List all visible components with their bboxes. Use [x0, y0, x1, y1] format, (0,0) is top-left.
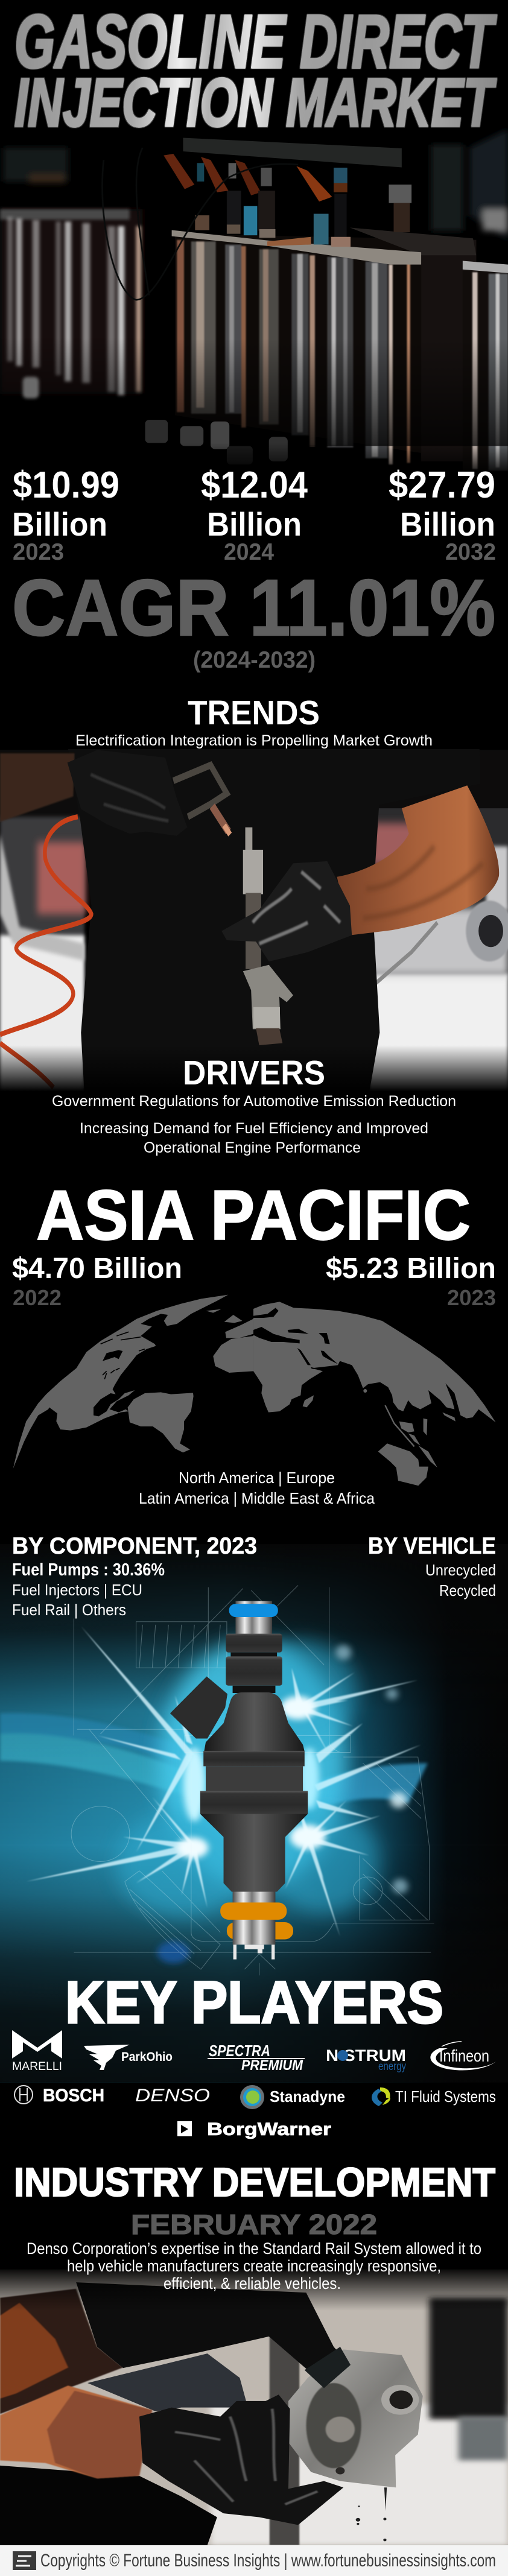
blue o-ring — [229, 1604, 278, 1617]
by component list: Fuel Pumps : 30.36% — [12, 1560, 165, 1580]
2023 value: 2023 — [13, 539, 64, 565]
logo: BorgWarner — [177, 2119, 331, 2139]
by vehicle list: Recycled — [439, 1581, 496, 1600]
vertical falloff — [0, 1544, 508, 2083]
fuel injector — [243, 828, 293, 1045]
logo: ParkOhio: ParkOhio — [121, 2050, 173, 2064]
centre tank — [172, 227, 476, 464]
madagascar — [303, 1395, 314, 1407]
lower tank shade — [0, 338, 508, 446]
side connector — [170, 1676, 227, 1738]
by vehicle heading: BY VEHICLE — [368, 1533, 496, 1559]
by vehicle list: Unrecycled — [425, 1561, 496, 1579]
world map dome — [13, 1295, 496, 1486]
2023 value: $10.99 — [13, 464, 119, 506]
region heading: ASIA PACIFIC — [36, 1176, 471, 1255]
other regions list — [139, 1469, 375, 1507]
arctic channels — [101, 1332, 145, 1379]
logo: Stanadyne: Stanadyne — [270, 2087, 345, 2106]
top fade — [0, 2267, 508, 2311]
dark clothing lower left — [0, 2466, 217, 2545]
drivers heading: DRIVERS — [183, 1054, 325, 1092]
market size figures — [12, 464, 496, 565]
logo: Infineon: Infineon — [439, 2046, 489, 2065]
japan and kamchatka — [442, 1413, 456, 1422]
bottom silver pipe — [233, 1891, 275, 1945]
2024 value — [201, 464, 308, 565]
tool held in top hand — [173, 765, 230, 835]
title — [14, 0, 497, 141]
halo around injector — [159, 1640, 347, 1886]
red air hose — [0, 817, 91, 1087]
right arm — [337, 785, 499, 935]
sulawesi — [408, 1434, 421, 1446]
bright flares — [157, 1645, 408, 1963]
development date: FEBRUARY 2022 — [131, 2209, 377, 2240]
top silver pipe — [235, 1601, 272, 1634]
lower band — [200, 1791, 308, 1814]
logo: Marelli — [12, 2030, 62, 2073]
lower collar — [226, 1656, 282, 1686]
2023 regional value: $5.23 Billion — [326, 1253, 496, 1285]
logo: Marelli: MARELLI — [12, 2060, 62, 2073]
black t-shirt — [68, 749, 480, 1092]
blueprint lines — [71, 1586, 434, 1975]
lower forearm — [0, 2385, 152, 2478]
key player logos — [12, 2030, 496, 2139]
main body — [204, 1692, 305, 1752]
top gloved hand — [68, 750, 187, 836]
eurasia and africa — [253, 1302, 496, 1422]
trends heading: TRENDS — [188, 694, 320, 732]
by vehicle list — [425, 1561, 496, 1600]
logo: Infineon — [430, 2042, 496, 2071]
2032 value: 2032 — [445, 539, 496, 565]
clips and connectors — [164, 154, 411, 247]
upper band — [203, 1751, 305, 1766]
hero photo: fuel injector test bench — [0, 129, 508, 476]
right tank — [463, 261, 508, 470]
2032 value — [389, 464, 496, 565]
upper black glove — [76, 2282, 350, 2388]
north america and greenland — [13, 1295, 228, 1469]
development description: efficient, & reliable vehicles. — [164, 2274, 341, 2293]
logo: Bosch — [14, 2086, 104, 2106]
iceland — [206, 1309, 221, 1313]
left blurred tank — [0, 209, 142, 395]
injector — [170, 1601, 308, 1960]
2023 value — [12, 464, 119, 565]
new guinea — [418, 1446, 437, 1467]
other regions list: North America | Europe — [179, 1469, 335, 1487]
blurred workshop background — [0, 2270, 508, 2545]
borneo — [399, 1422, 414, 1432]
by component list — [12, 1560, 165, 1619]
industry development photo: oily gloves holding fuel pump — [0, 2267, 508, 2545]
logo: Nostrum Energy: N STRUM — [326, 2046, 406, 2065]
eurasia, africa, oceania — [253, 1302, 496, 1486]
by component list: Fuel Rail | Others — [12, 1601, 126, 1619]
development description: help vehicle manufacturers create increasingly responsive, — [67, 2257, 441, 2275]
logo: Spectra Premium — [208, 2042, 305, 2074]
philippines — [424, 1419, 427, 1435]
bottle collar — [305, 2347, 351, 2388]
footer logo — [13, 2551, 36, 2570]
by component list: Fuel Injectors | ECU — [12, 1581, 142, 1599]
light streaks — [0, 1713, 428, 1812]
west africa — [213, 1336, 253, 1373]
2022 regional value: 2022 — [13, 1285, 62, 1310]
inland seas — [253, 1308, 338, 1370]
logo: Nostrum Energy — [326, 2046, 406, 2073]
bottom fade — [0, 443, 508, 476]
development description — [27, 2239, 481, 2293]
wires — [102, 148, 298, 300]
drivers text — [52, 1093, 456, 1156]
key players heading: KEY PLAYERS — [65, 1969, 443, 2036]
south america — [128, 1392, 194, 1452]
upper orange ring — [220, 1902, 287, 1920]
upper forearm — [0, 2289, 123, 2414]
2023 regional value: 2023 — [447, 1285, 496, 1310]
lower orange ring — [227, 1922, 293, 1940]
logo: ParkOhio — [84, 2045, 173, 2070]
bottom gloved hand — [221, 861, 352, 961]
dark sleeve — [87, 2353, 248, 2411]
2022 regional value — [12, 1253, 182, 1310]
footer — [0, 2545, 508, 2576]
left forearm — [0, 753, 75, 822]
fuel pump housing — [288, 2349, 423, 2487]
CAGR period: (2024-2032) — [193, 647, 316, 673]
trends photo: mechanic holding injector — [0, 749, 508, 1108]
sumatra and java — [385, 1405, 414, 1446]
light rays — [26, 1626, 421, 1937]
panel: injector illustration with blue energy background — [0, 1544, 508, 2083]
lower oily glove — [139, 2394, 343, 2525]
western europe — [225, 1319, 253, 1338]
upper collar — [226, 1634, 282, 1653]
2032 value: Billion — [400, 505, 495, 543]
logo: Denso: DENSO — [135, 2086, 210, 2106]
uk — [224, 1315, 243, 1323]
overhead manifold bar — [183, 138, 402, 167]
logo: Nostrum Energy: energy — [378, 2060, 406, 2073]
logo: Stanadyne — [240, 2085, 345, 2109]
2024 value: $12.04 — [201, 464, 308, 506]
australia — [378, 1443, 428, 1486]
drivers text: Operational Engine Performance — [144, 1139, 361, 1156]
trends text: Electrification Integration is Propelling Market Growth — [75, 732, 433, 749]
logo: Spectra Premium: SPECTRA — [209, 2042, 270, 2060]
prongs — [233, 1945, 275, 1960]
other regions list: Latin America | Middle East & Africa — [139, 1489, 375, 1507]
2024 value: Billion — [207, 505, 302, 543]
nozzle body — [200, 1814, 308, 1891]
drivers text: Increasing Demand for Fuel Efficiency and Improved — [80, 1120, 428, 1137]
logo: BorgWarner: BorgWarner — [207, 2119, 331, 2139]
blue background — [0, 1544, 508, 2083]
small fittings on floor — [23, 377, 288, 464]
2032 value: $27.79 — [389, 464, 495, 506]
2023 value: Billion — [12, 505, 107, 543]
upper background blur — [3, 129, 508, 240]
bottom fade — [0, 1045, 508, 1092]
by component heading: BY COMPONENT, 2023 — [12, 1533, 257, 1559]
hudson bay — [103, 1350, 122, 1361]
2023 regional value — [326, 1253, 496, 1310]
2022 regional value: $4.70 Billion — [12, 1253, 182, 1285]
logo: Spectra Premium: PREMIUM — [241, 2057, 303, 2074]
background cars — [0, 750, 508, 1092]
drivers text: Government Regulations for Automotive Emission Reduction — [52, 1093, 456, 1110]
oil drips — [356, 2487, 387, 2541]
logo: Bosch: BOSCH — [43, 2086, 104, 2106]
2024 value: 2024 — [224, 539, 274, 565]
sri lanka — [363, 1389, 367, 1393]
americas and western europe — [13, 1295, 253, 1469]
